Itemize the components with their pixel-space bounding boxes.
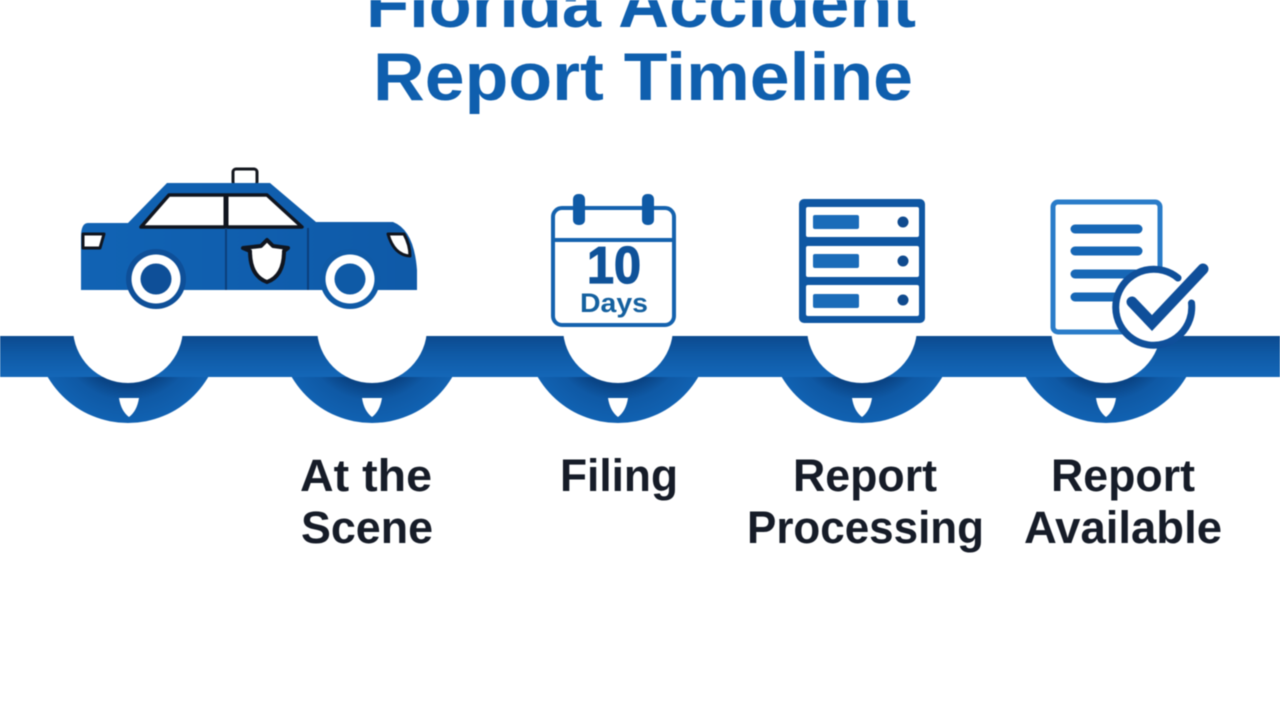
- label: report available: [1024, 450, 1222, 553]
- icon: calendar 10 days: Days: [580, 288, 648, 318]
- label: report processing: Report: [793, 450, 937, 501]
- label: report available: Report: [1051, 450, 1195, 501]
- timeline band: [0, 335, 1280, 424]
- title: Report Timeline: [373, 39, 913, 115]
- label: report processing: [747, 450, 984, 553]
- label: report processing: Processing: [747, 502, 984, 553]
- icon: server stack: [799, 199, 925, 323]
- label: at the scene: Scene: [301, 502, 433, 553]
- label: at the scene: [300, 450, 433, 553]
- icon: calendar 10 days: 10: [587, 237, 641, 295]
- icon: calendar 10 days: [553, 194, 674, 325]
- label: at the scene: At the: [300, 450, 432, 501]
- title: [366, 0, 916, 115]
- icon: document with check: [1053, 202, 1203, 345]
- icon: police car: [81, 169, 417, 309]
- label: filing: Filing: [560, 450, 678, 501]
- label: report available: Available: [1024, 502, 1222, 553]
